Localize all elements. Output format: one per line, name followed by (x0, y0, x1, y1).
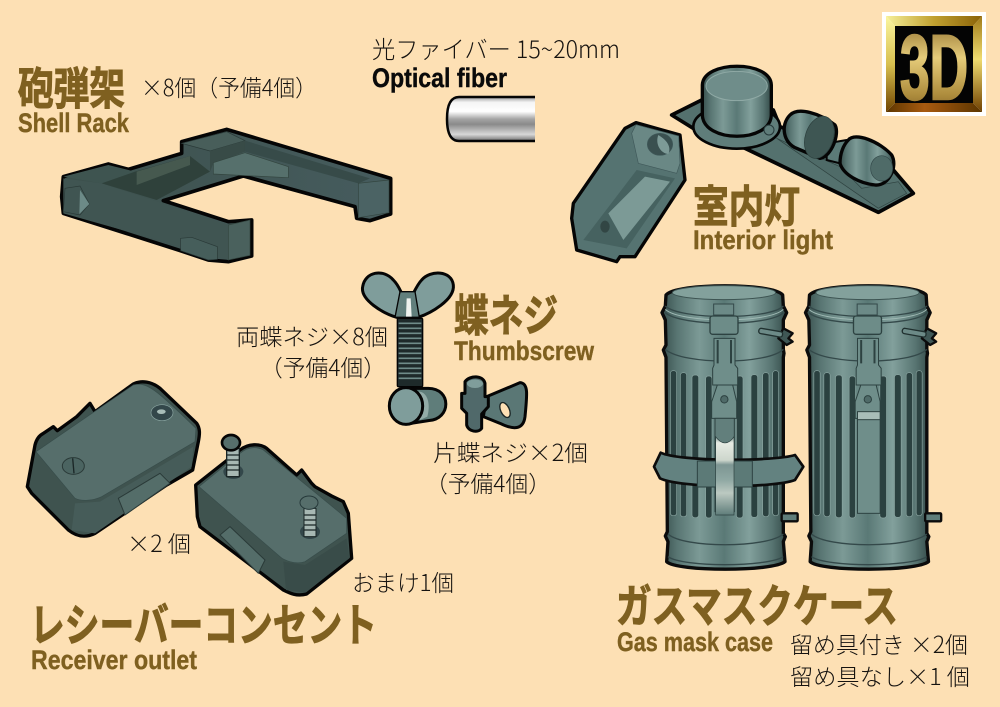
text: double wing quantity (236, 318, 388, 383)
text: optical fiber label: Optical fiber (372, 63, 507, 93)
heading: thumbscrew (454, 280, 595, 366)
gas mask case with clasp (654, 286, 803, 569)
text: shell rack quantity: ×8個（予備4個） (141, 69, 317, 103)
receiver outlet parts (27, 382, 352, 595)
heading: receiver outlet: レシーバーコンセント (30, 589, 377, 654)
flat plate (857, 417, 880, 513)
interior light parts (572, 66, 913, 262)
heading: thumbscrew: Thumbscrew (454, 336, 595, 366)
outlet box left (27, 382, 199, 536)
heading: gas mask case: ガスマスクケース (616, 570, 898, 635)
shell rack part (62, 129, 391, 262)
text: single wing quantity: （予備4個） (425, 465, 551, 499)
heading: shell rack (18, 53, 130, 138)
heading: thumbscrew: 蝶ネジ (454, 280, 558, 344)
gas mask case without clasp (805, 286, 941, 569)
light cover (572, 123, 685, 262)
text: gas mask quantity: 留め具なし×1 個 (790, 658, 970, 692)
tall strap plate (715, 418, 734, 512)
outlet box right (196, 435, 352, 595)
text: optical fiber label (372, 30, 620, 93)
heading: interior light: 室内灯 (693, 171, 800, 235)
heading: interior light: Interior light (693, 225, 833, 255)
text: single wing quantity (425, 434, 588, 499)
icon: 3D badge (882, 12, 986, 119)
light base with lamps (672, 66, 913, 212)
text: x2 quantity: ×2 個 (127, 525, 191, 559)
thumbscrew parts (362, 273, 527, 431)
text: single wing quantity: 片蝶ネジ×2個 (433, 434, 588, 468)
text: gas mask quantity (790, 626, 970, 692)
single wing screw (462, 377, 527, 431)
text: double wing quantity: 両蝶ネジ×8個 (236, 318, 388, 352)
text: gas mask quantity: 留め具付き ×2個 (790, 626, 968, 660)
heading: gas mask case (616, 570, 898, 657)
waist strap (654, 453, 803, 486)
heading: shell rack: Shell Rack (18, 108, 130, 138)
heading: gas mask case: Gas mask case (617, 627, 773, 657)
shiny buckle (716, 437, 734, 515)
heading: receiver outlet (30, 589, 377, 675)
text: optical fiber label: 光ファイバー 15~20mm (372, 30, 620, 65)
double wing screw (362, 273, 453, 424)
heading: shell rack: 砲弾架 (18, 53, 125, 117)
optical fiber part (447, 97, 535, 141)
text: double wing quantity: （予備4個） (260, 349, 386, 383)
text: bonus quantity: おまけ1個 (352, 564, 454, 598)
heading: receiver outlet: Receiver outlet (31, 645, 197, 675)
